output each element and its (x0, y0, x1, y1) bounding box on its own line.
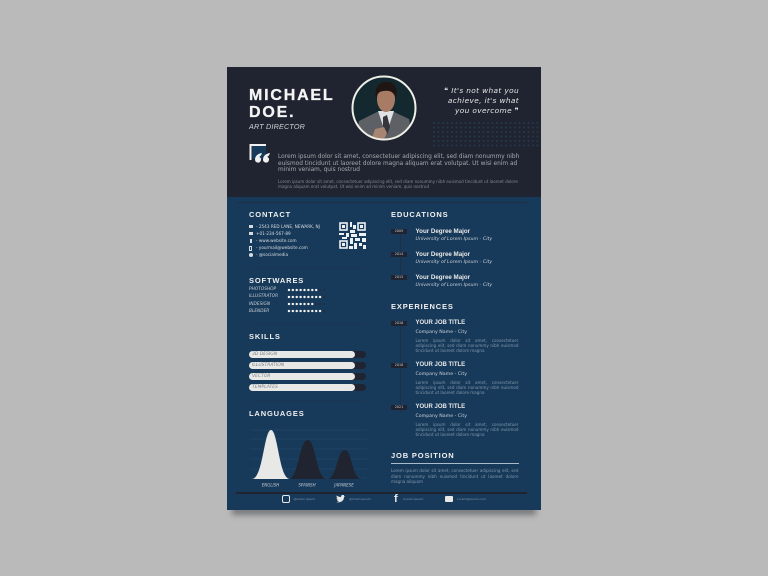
contact list: - @socialmedia (256, 252, 288, 257)
education entries: University of Lorem Ipsum - City (416, 283, 492, 288)
experience entries: Lorem ipsum dolor sit amet, consectetuer (416, 338, 518, 342)
language chart: JAPANESE (333, 482, 354, 488)
name: MICHAEL (249, 87, 334, 104)
divider top (237, 202, 527, 203)
contact list (249, 224, 320, 257)
right column (391, 210, 519, 484)
experience entries: Lorem ipsum dolor sit amet, consectetuer (416, 380, 518, 384)
job title: ART DIRECTOR (249, 122, 305, 130)
mail icon (445, 496, 453, 502)
footer: Lorem@ipsum.com (457, 497, 486, 501)
education entries: University of Lorem Ipsum - City (416, 260, 492, 265)
name: DOE. (249, 104, 295, 121)
experience entries: tincidunt ut laoreet dolore magna (416, 348, 484, 353)
contact list: - 2543 RED LANE, NEWARK, NJ (256, 224, 320, 229)
experience entries: Company Name - City (416, 414, 467, 418)
skill bars (249, 351, 366, 391)
header panel (227, 67, 541, 197)
softwares heading: SOFTWARES (249, 276, 304, 285)
skill bars: TEMPLATES (252, 385, 278, 390)
footer: @lorem.ipsum (349, 497, 371, 501)
experience entries: 2018 (395, 363, 403, 367)
experience entries: tincidunt ut laoreet dolore magna (416, 432, 484, 437)
software ratings: BLENDER (249, 309, 269, 314)
intro text: Lorem ipsum dolor sit amet, consectetuer adipiscing elit, sed diam nonummy nibh (278, 154, 519, 160)
job position heading: JOB POSITION (391, 451, 455, 460)
facebook icon: f (394, 493, 398, 505)
experience entries (391, 320, 518, 437)
twitter icon (336, 495, 345, 502)
quote icon (250, 144, 270, 163)
footer (236, 492, 527, 505)
job position text: magna aliquam (391, 479, 423, 484)
software ratings: INDESIGN (249, 302, 270, 307)
job position text: diam nonummy nibh euismod tincidunt ut laoreet dolore (391, 474, 518, 479)
name (249, 87, 334, 121)
footer: /Lorem.ipsum (403, 497, 423, 501)
software ratings (249, 286, 325, 314)
experience entries: YOUR JOB TITLE (416, 404, 465, 410)
drop shadow (232, 506, 536, 515)
education entries (391, 228, 492, 288)
experience entries: Lorem ipsum dolor sit amet, consectetuer (416, 422, 518, 426)
quote (444, 86, 519, 115)
language chart: ENGLISH (262, 482, 279, 488)
quote: achieve, it's what (448, 96, 519, 105)
skill bars: VECTOR (252, 374, 270, 379)
intro text: euismod tincidunt ut laoreet dolore magna aliquam erat volutpat. Ut wisi enim ad (278, 161, 517, 167)
dot pattern (433, 122, 538, 146)
experience entries: YOUR JOB TITLE (416, 320, 465, 326)
experience entries: adipiscing elit, sed diam nonummy nibh euismod (416, 343, 518, 348)
intro text: minim veniam, quis nostrud (278, 167, 360, 173)
experience entries: 2016 (395, 321, 403, 325)
experience entries: 2021 (395, 405, 403, 409)
job position rule (391, 462, 518, 464)
timeline line experience (400, 323, 401, 413)
instagram icon (282, 495, 290, 503)
software ratings: ILLUSTRATOR (249, 294, 278, 299)
contact list: - yourmail@website.com (256, 245, 308, 250)
skill bars: ILLUSTRATION (252, 363, 284, 368)
qr code (339, 222, 366, 249)
job position text (391, 468, 518, 484)
experience entries: Company Name - City (416, 372, 467, 376)
education entries: Your Degree Major (416, 274, 470, 281)
experience entries: adipiscing elit, sed diam nonummy nibh euismod (416, 427, 518, 432)
small print: Lorem ipsum dolor sit amet, consectetuer adipiscing elit, sed diam nonummy nibh euismod tincidunt ut laoreet dolore (278, 179, 518, 184)
left column (249, 210, 367, 488)
small print (278, 179, 518, 189)
footer: @lorem.ipsum (294, 497, 315, 501)
education entries: Your Degree Major (416, 228, 470, 234)
education entries: University of Lorem Ipsum - City (416, 237, 492, 242)
education entries: 2009 (395, 228, 403, 232)
educations heading: EDUCATIONS (391, 210, 449, 219)
experiences heading: EXPERIENCES (391, 302, 454, 311)
skill bars: 3D DESIGN (252, 352, 277, 357)
portrait (352, 76, 416, 140)
experience entries: tincidunt ut laoreet dolore magna (416, 390, 484, 395)
small print: magna aliquam erat volutpat. Ut wisi enim ad minim veniam, quis nostrud (278, 184, 429, 189)
quote: ❝ It's not what you (444, 86, 519, 95)
contact list: - www.website.com (256, 238, 297, 243)
education entries: 2015 (395, 275, 403, 279)
skills heading: SKILLS (249, 332, 281, 341)
language chart (250, 430, 367, 488)
contact heading: CONTACT (249, 210, 291, 219)
software ratings: PHOTOSHOP (249, 287, 276, 292)
education entries: 2014 (395, 252, 403, 256)
experience entries: adipiscing elit, sed diam nonummy nibh euismod (416, 385, 518, 390)
contact list: +01-234-567-89 (256, 231, 291, 236)
resume page (227, 67, 541, 510)
timeline line education (400, 229, 401, 277)
quote: you overcome ❞ (455, 106, 519, 115)
intro text (278, 153, 519, 173)
experience entries: YOUR JOB TITLE (416, 362, 465, 368)
education entries: Your Degree Major (416, 251, 470, 258)
language chart: SPANISH (298, 482, 316, 488)
experience entries: Company Name - City (416, 330, 467, 334)
languages heading: LANGUAGES (249, 409, 305, 418)
job position text: Lorem ipsum dolor sit amet, consectetuer adipiscing elit, sed (391, 468, 518, 473)
